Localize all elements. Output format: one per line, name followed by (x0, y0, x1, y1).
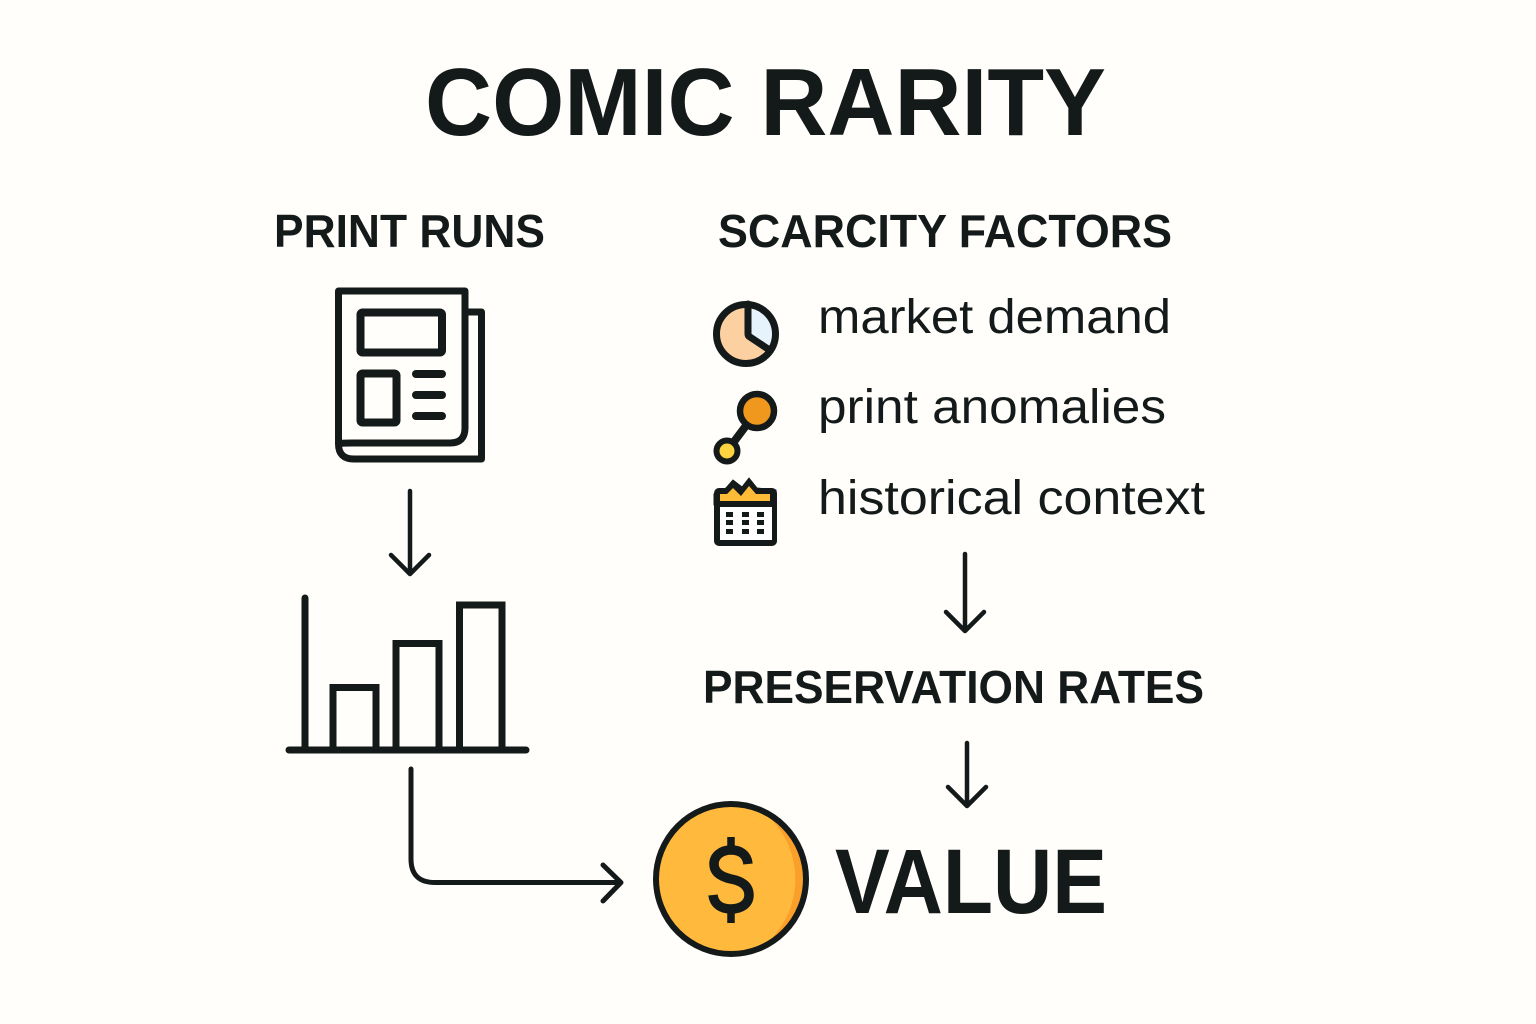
text: historical context: historical context (818, 472, 1205, 525)
arrow: scarcity to preservation (946, 554, 984, 631)
heading: scarcity factors: SCARCITY FACTORS (718, 205, 1172, 257)
icon: newspaper (338, 291, 482, 459)
arrow: preservation to value (948, 743, 986, 806)
bar chart (289, 598, 526, 750)
text: market demand: market demand (818, 291, 1171, 344)
value label: VALUE (835, 831, 1107, 933)
arrow: chart to value (411, 769, 621, 901)
icon: pie chart (716, 304, 776, 364)
icon: connected nodes (716, 394, 774, 462)
title: COMIC RARITY (425, 49, 1106, 156)
heading: print runs: PRINT RUNS (274, 205, 545, 257)
icon: dollar coin (656, 804, 806, 954)
icon: calendar (714, 478, 777, 546)
arrow: newspaper to chart (391, 491, 429, 574)
heading: preservation rates: PRESERVATION RATES (703, 661, 1204, 713)
text: print anomalies: print anomalies (818, 381, 1166, 434)
